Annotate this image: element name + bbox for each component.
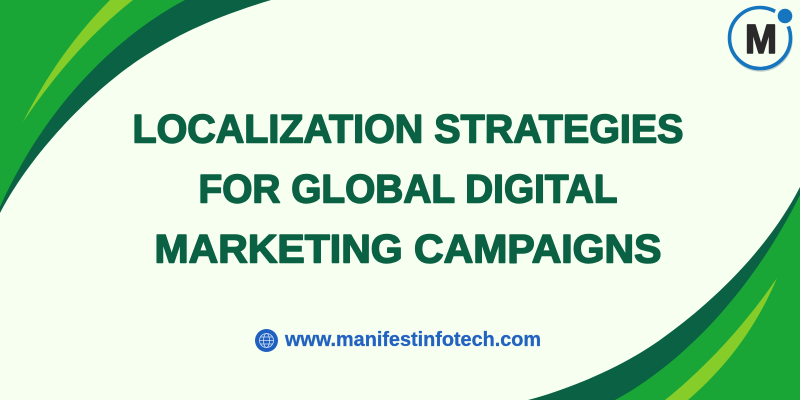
icon: globe	[255, 329, 278, 352]
title: LOCALIZATION STRATEGIES	[132, 108, 684, 152]
bottom-right corner swoosh	[528, 187, 800, 400]
title	[132, 108, 684, 272]
logo: M in blue ring: M	[745, 16, 777, 62]
top-left corner swoosh	[0, 0, 271, 213]
logo: M in blue ring	[730, 5, 796, 70]
website url: www.manifestinfotech.com	[284, 329, 541, 351]
title: FOR GLOBAL DIGITAL	[198, 168, 618, 212]
title: MARKETING CAMPAIGNS	[154, 228, 662, 272]
